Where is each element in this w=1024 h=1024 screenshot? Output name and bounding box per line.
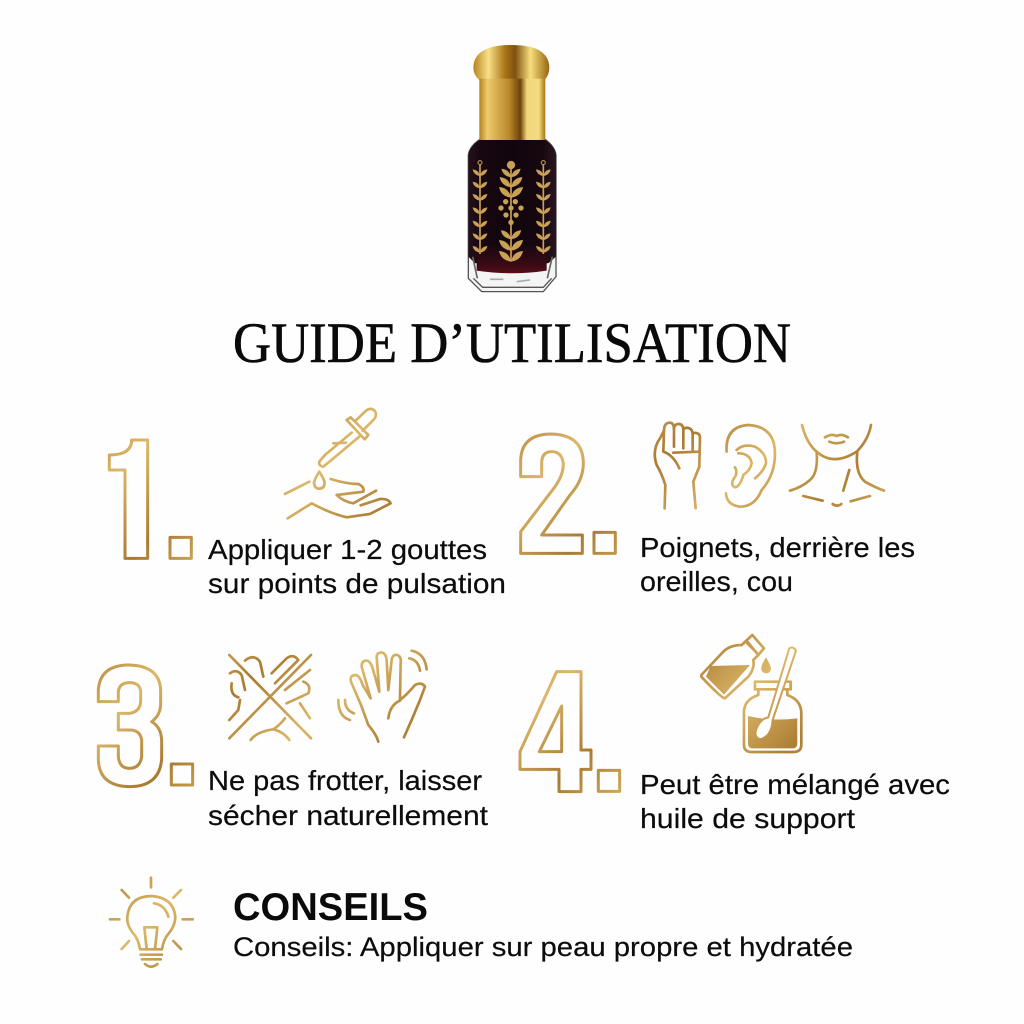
conseils heading: CONSEILS <box>233 886 428 929</box>
product bottle <box>468 45 556 292</box>
step 4 <box>520 635 950 834</box>
icon: tilted oil bottle <box>701 635 771 698</box>
step 3 text: Ne pas frotter, laisser <box>208 765 482 796</box>
icon: wrist fist <box>655 423 700 508</box>
icon: light bulb <box>110 878 193 967</box>
step 2 text: Poignets, derrière les <box>640 532 915 563</box>
icon: dropper over hand <box>285 409 391 518</box>
conseils section <box>110 878 853 967</box>
step 4 text: huile de support <box>640 803 855 834</box>
step 2 text: oreilles, cou <box>640 566 793 597</box>
icon: crossed rubbing hands <box>229 655 311 740</box>
step 3 text: sécher naturellement <box>208 800 488 831</box>
icon: waving drying hand <box>338 651 427 742</box>
icon: oil drop <box>761 657 771 673</box>
step 1 text: sur points de pulsation <box>208 568 506 599</box>
icon: neck <box>790 425 884 506</box>
step 1 text: Appliquer 1-2 gouttes <box>208 534 487 565</box>
step 1 <box>109 409 506 599</box>
step 1 numeral <box>109 440 191 558</box>
conseils text: Conseils: Appliquer sur peau propre et hydratée <box>233 932 853 962</box>
step 4 text: Peut être mélangé avec <box>640 769 950 800</box>
title: GUIDE D’UTILISATION <box>233 312 791 375</box>
icon: ear <box>726 425 775 507</box>
step 3 numeral <box>98 665 193 787</box>
step 2 <box>521 423 915 597</box>
step 4 numeral <box>520 672 620 792</box>
step 3 <box>98 651 488 831</box>
step 2 numeral <box>521 434 615 553</box>
icon: jar with spoon <box>744 648 801 752</box>
